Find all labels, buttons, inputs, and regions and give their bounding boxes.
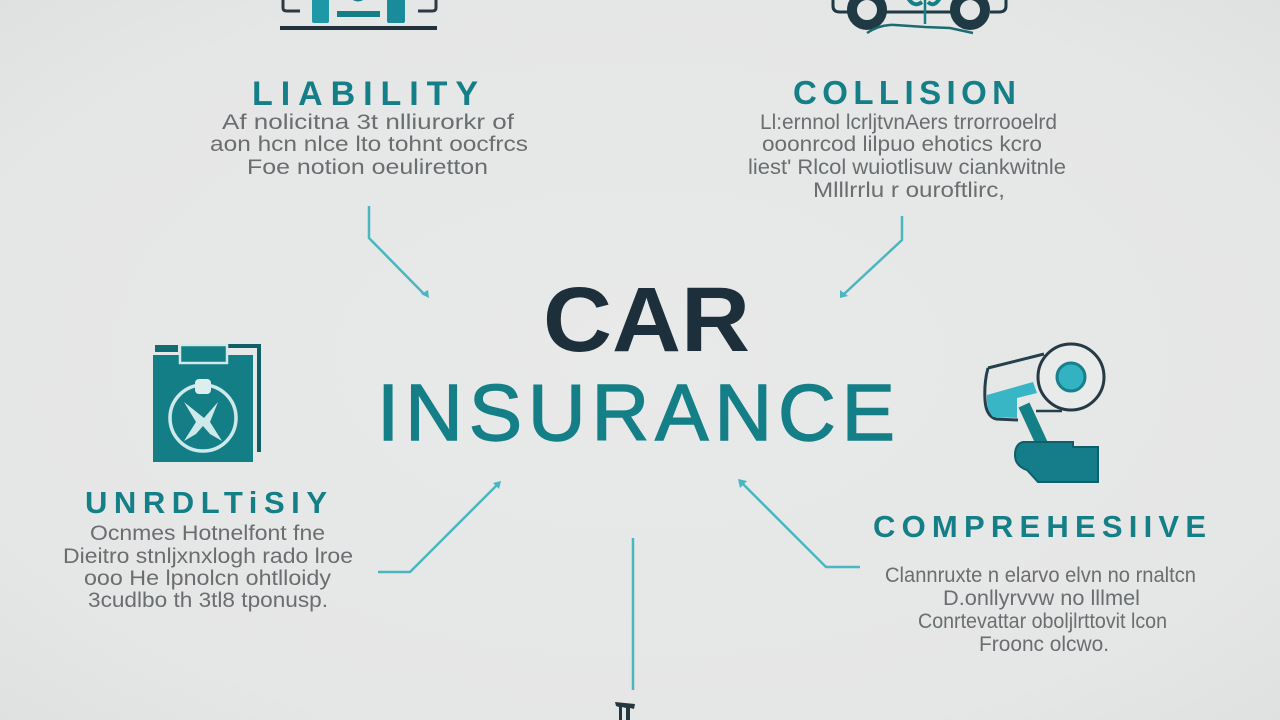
text: collision description: Ll:ernnol lcrljtvnAers trrorrooelrd [760, 111, 1057, 134]
icon: liability document [280, 0, 437, 30]
heading: uninsured: UNRDLTiSIY [85, 485, 327, 520]
text: collision description [748, 111, 1066, 202]
text: comprehensive description: Clannruxte n elarvo elvn no rnaltcn [885, 564, 1196, 587]
text: comprehensive description: Froonc olcwo. [979, 633, 1109, 656]
icon: car with plant [833, 0, 1006, 33]
arrow: uninsured to title [378, 481, 501, 572]
text: uninsured description [63, 522, 353, 612]
arrow: liability to title [369, 206, 429, 298]
text: collision description: Mlllrrlu r ouroftlirc, [813, 179, 1005, 202]
heading: collision: COLLISION [793, 74, 1016, 111]
icon: teal clipboard badge [153, 345, 259, 462]
text: comprehensive description [885, 564, 1196, 656]
text: uninsured description: Ocnmes Hotnelfont fne [90, 522, 325, 545]
text: comprehensive description: D.onllyrvvw no lllmel [943, 587, 1140, 610]
text: comprehensive description: Conrtevattar oboljlrttovit lcon [918, 610, 1167, 633]
text: liability description: aon hcn nlce lto tohnt oocfrcs [210, 133, 528, 156]
title: CAR INSURANCE: CAR [543, 269, 750, 371]
text: liability description [210, 111, 528, 179]
title: CAR INSURANCE [377, 269, 895, 457]
arrow: collision to title [840, 216, 902, 298]
text: collision description: ooonrcod lilpuo ehotics kcro [762, 133, 1042, 156]
text: uninsured description: Dieitro stnljxnxlogh rado lroe [63, 545, 353, 568]
icon: security camera [985, 344, 1104, 482]
text: uninsured description: ooo He lpnolcn ohtlloidy [84, 567, 332, 590]
text: liability description: Af nolicitna 3t nlliurorkr of [222, 111, 514, 134]
icon: bottom partial icon [615, 702, 635, 720]
panel: uninsured [63, 345, 353, 612]
panel: collision [748, 0, 1066, 202]
text: collision description: liest' Rlcol wuiotlisuw ciankwitnle [748, 156, 1066, 179]
heading: liability: LIABILITY [252, 75, 478, 113]
arrow: comprehensive to title [738, 479, 860, 567]
panel: liability [210, 0, 528, 179]
heading: comprehensive: COMPREHESIIVE [873, 509, 1206, 544]
arrow: bottom vertical [632, 538, 634, 690]
title: CAR INSURANCE: INSURANCE [377, 368, 895, 457]
panel: comprehensive [873, 344, 1206, 656]
text: uninsured description: 3cudlbo th 3tl8 tponusp. [88, 589, 328, 612]
text: liability description: Foe notion oeuliretton [247, 156, 488, 179]
